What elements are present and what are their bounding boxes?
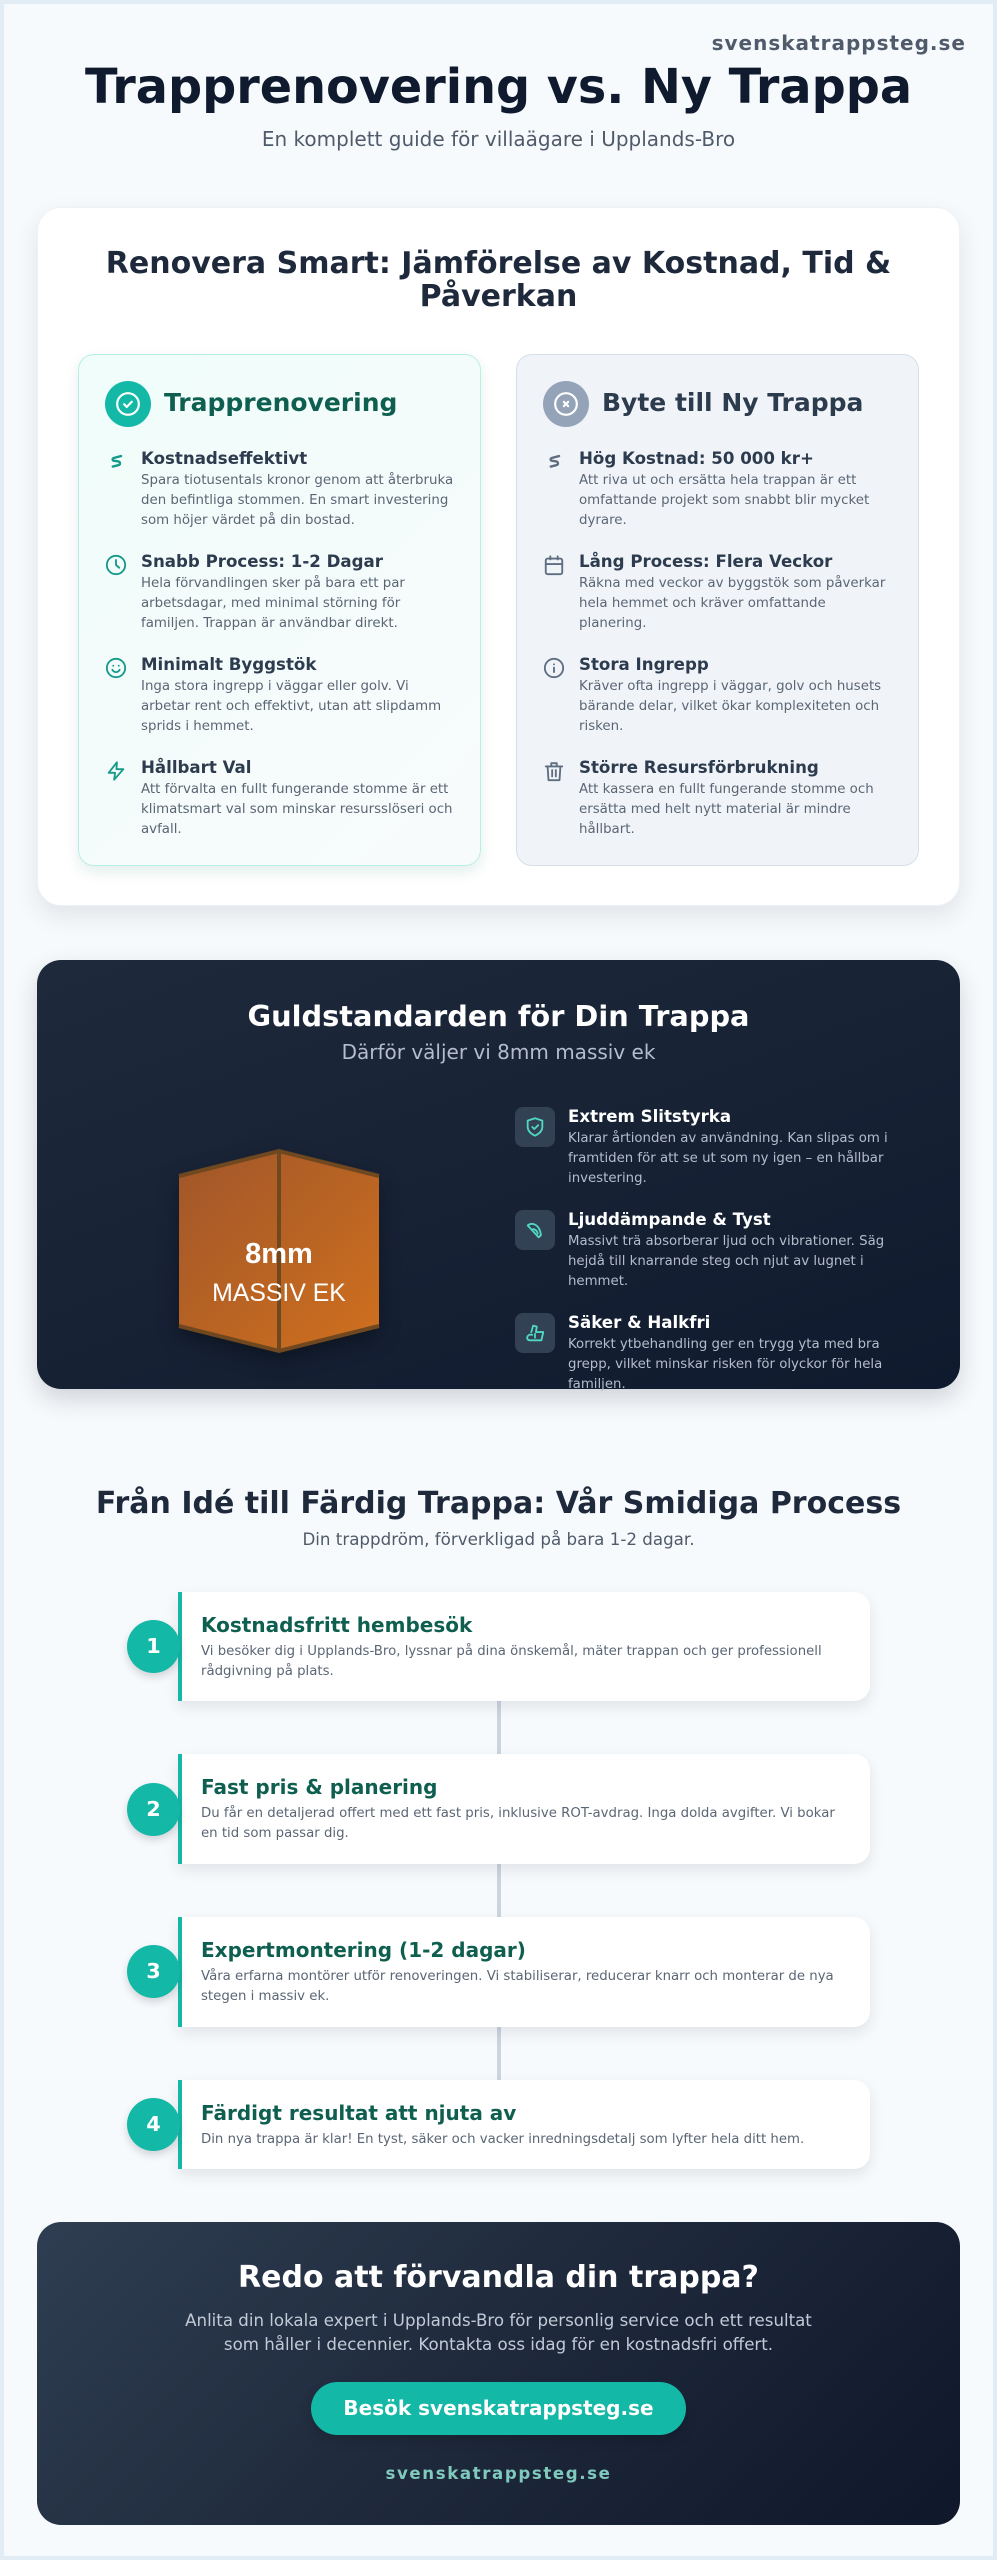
feature: ljuddämpande: hejdå till knarrande steg och njut av lugnet i [568, 1254, 864, 1269]
feature: ljuddämpande [515, 1210, 884, 1289]
comparison heading: Renovera Smart: Jämförelse av Kostnad, Tid & [106, 246, 891, 281]
drawback: hög kostnad: Hög Kostnad: 50 000 kr+ [579, 449, 814, 468]
step 3 card: stegen i massiv ek. [201, 1989, 329, 2004]
feature: extrem slitstyrka: framtiden för att se ut som ny igen – en hållbar [568, 1151, 883, 1166]
ny trappa heading: Byte till Ny Trappa [602, 388, 863, 417]
feature: ljuddämpande: Massivt trä absorberar ljud och vibrationer. Säg [568, 1234, 884, 1249]
cta text [185, 2311, 812, 2354]
panel: guldstandarden [37, 960, 960, 1389]
feature: ljuddämpande: hemmet. [568, 1274, 628, 1289]
feature: säker och halkfri: familjen. [568, 1377, 626, 1392]
drawback: lång process [544, 552, 886, 631]
connector 3 [497, 2027, 501, 2080]
feature: extrem slitstyrka: Klarar årtionden av användning. Kan slipas om i [568, 1131, 888, 1146]
drawback: hög kostnad: Att riva ut och ersätta hela trappan är ett [579, 473, 856, 488]
cta button: Besök svenskatrappsteg.se [343, 2396, 654, 2420]
step 4 number: 4 [146, 2112, 161, 2136]
title: Trapprenovering vs. Ny Trappa [85, 60, 912, 115]
cta text: Anlita din lokala expert i Upplands-Bro för personlig service och ett resultat [185, 2311, 812, 2330]
drawback: stora ingrepp: bärande delar, vilket ökar komplexiteten och [579, 699, 879, 714]
feature: ljuddämpande: Ljuddämpande & Tyst [568, 1210, 771, 1229]
step 3 number [127, 1945, 180, 1998]
step 2 card: Fast pris & planering [201, 1775, 437, 1799]
cta text: som håller i decennier. Kontakta oss idag för en kostnadsfri offert. [224, 2335, 773, 2354]
drawback: hög kostnad: dyrare. [579, 513, 627, 528]
label: massiv ek: MASSIV EK [212, 1280, 346, 1307]
step 4 card: Färdigt resultat att njuta av [201, 2101, 516, 2125]
guldstandarden heading: Guldstandarden för Din Trappa [248, 999, 750, 1033]
cta button [311, 2382, 686, 2435]
step 1 card: Vi besöker dig i Upplands-Bro, lyssnar på dina önskemål, mäter trappan och ger professionell [201, 1644, 822, 1659]
step 4 card [178, 2080, 870, 2169]
feature: extrem slitstyrka: Extrem Slitstyrka [568, 1107, 731, 1126]
drawback: hög kostnad: omfattande projekt som snabbt blir mycket [579, 493, 869, 508]
icon: sound [515, 1210, 555, 1250]
drawback: lång process: Räkna med veckor av byggstök som påverkar [579, 576, 885, 591]
illustration: 8mm massiv ek block [177, 1149, 381, 1360]
feature: säker och halkfri: Säker & Halkfri [568, 1313, 710, 1332]
icon: x circle [543, 381, 589, 427]
step 2 card: Du får en detaljerad offert med ett fast pris, inklusive ROT-avdrag. Inga dolda avgifter. Vi bokar [201, 1806, 835, 1821]
benefit: hållbart val [108, 758, 453, 837]
drawback: större resursförbrukning [544, 758, 874, 837]
step 4 number [127, 2098, 180, 2151]
subtitle: En komplett guide för villaägare i Upplands-Bro [262, 127, 735, 151]
drawback: större resursförbrukning: ersätta med helt nytt material är mindre [579, 802, 851, 817]
panel: call to action [37, 2222, 960, 2525]
drawback: större resursförbrukning: Större Resursförbrukning [579, 758, 819, 777]
benefit: kostnadseffektivt: Spara tiotusentals kronor genom att återbruka [141, 473, 453, 488]
panel: trapprenovering [78, 354, 481, 866]
step 2 number: 2 [146, 1797, 161, 1821]
benefit: kostnadseffektivt: som höjer värdet på din bostad. [141, 513, 355, 528]
feature: säker och halkfri [515, 1313, 882, 1392]
drawback: lång process: hela hemmet och kräver omfattande [579, 596, 826, 611]
benefit: snabb process: familjen. Trappan är användbar direkt. [141, 616, 398, 631]
step 3 card: Våra erfarna montörer utför renoveringen. Vi stabiliserar, reducerar knarr och monterar de nya [201, 1969, 834, 1984]
step 1 number: 1 [146, 1634, 161, 1658]
label: 8mm: 8mm [245, 1238, 313, 1270]
step 1 card: rådgivning på plats. [201, 1664, 334, 1679]
feature: extrem slitstyrka: investering. [568, 1171, 647, 1186]
step 3 card: Expertmontering (1-2 dagar) [201, 1938, 526, 1962]
panel: byte till ny trappa [516, 354, 919, 866]
step 2 number [127, 1783, 180, 1836]
benefit: minimalt byggstök: arbetar rent och effektivt, utan att slipdamm [141, 699, 441, 714]
feature: säker och halkfri: Korrekt ytbehandling ger en trygg yta med bra [568, 1337, 880, 1352]
comparison heading: Påverkan [420, 279, 577, 314]
drawback: större resursförbrukning: hållbart. [579, 822, 635, 837]
panel: comparison card [37, 207, 960, 906]
benefit: minimalt byggstök: Minimalt Byggstök [141, 655, 316, 674]
process subtitle: Din trappdröm, förverkligad på bara 1-2 dagar. [302, 1529, 695, 1549]
benefit: minimalt byggstök: sprids i hemmet. [141, 719, 254, 734]
step 3 number: 3 [146, 1959, 161, 1983]
drawback: stora ingrepp: Stora Ingrepp [579, 655, 709, 674]
drawback: lång process: Lång Process: Flera Veckor [579, 552, 832, 571]
drawback: lång process: planering. [579, 616, 646, 631]
benefit: snabb process: Hela förvandlingen sker på bara ett par [141, 576, 405, 591]
step 1 card [178, 1592, 870, 1701]
icon: shield [515, 1107, 555, 1147]
benefit: kostnadseffektivt: Kostnadseffektivt [141, 449, 307, 468]
step 2 card [178, 1754, 870, 1864]
feature: säker och halkfri: grepp, vilket minskar risken för olyckor för hela [568, 1357, 882, 1372]
list: renovation benefits [106, 449, 453, 837]
process heading: Från Idé till Färdig Trappa: Vår Smidiga Process [96, 1486, 901, 1521]
drawback: stora ingrepp: risken. [579, 719, 623, 734]
connector 1 [497, 1701, 501, 1754]
cta heading: Redo att förvandla din trappa? [238, 2260, 759, 2295]
benefit: minimalt byggstök [106, 655, 441, 734]
feature: extrem slitstyrka [515, 1107, 888, 1186]
drawback: hög kostnad [549, 449, 869, 528]
cta site name: svenskatrappsteg.se [385, 2464, 612, 2483]
icon: check circle [105, 381, 151, 427]
benefit: hållbart val: avfall. [141, 822, 182, 837]
site name top right: svenskatrappsteg.se [712, 31, 966, 55]
benefit: snabb process: arbetsdagar, med minimal störning för [141, 596, 400, 611]
step 1 number [127, 1620, 180, 1673]
drawback: stora ingrepp [544, 655, 881, 734]
benefit: hållbart val: Att förvalta en fullt fungerande stomme är ett [141, 782, 448, 797]
step 4 card: Din nya trappa är klar! En tyst, säker och vacker inredningsdetalj som lyfter hela ditt hem. [201, 2132, 804, 2147]
step 2 card: en tid som passar dig. [201, 1826, 349, 1841]
drawback: större resursförbrukning: Att kassera en fullt fungerande stomme och [579, 782, 874, 797]
drawback: stora ingrepp: Kräver ofta ingrepp i väggar, golv och husets [579, 679, 881, 694]
benefit: snabb process: Snabb Process: 1-2 Dagar [141, 552, 383, 571]
benefit: hållbart val: klimatsmart val som minskar resursslöseri och [141, 802, 453, 817]
list: new stair drawbacks [544, 449, 886, 837]
trapprenovering heading: Trapprenovering [164, 388, 397, 417]
step 3 card [178, 1917, 870, 2027]
comparison heading [106, 246, 891, 314]
benefit: snabb process [106, 552, 405, 631]
step 1 card: Kostnadsfritt hembesök [201, 1613, 472, 1637]
benefit: minimalt byggstök: Inga stora ingrepp i väggar eller golv. Vi [141, 679, 409, 694]
guldstandarden subtitle: Därför väljer vi 8mm massiv ek [342, 1040, 655, 1064]
benefit: hållbart val: Hållbart Val [141, 758, 251, 777]
benefit: kostnadseffektivt: den befintliga stommen. En smart investering [141, 493, 448, 508]
icon: grip [515, 1313, 555, 1353]
benefit: kostnadseffektivt [111, 449, 453, 528]
connector 2 [497, 1864, 501, 1917]
